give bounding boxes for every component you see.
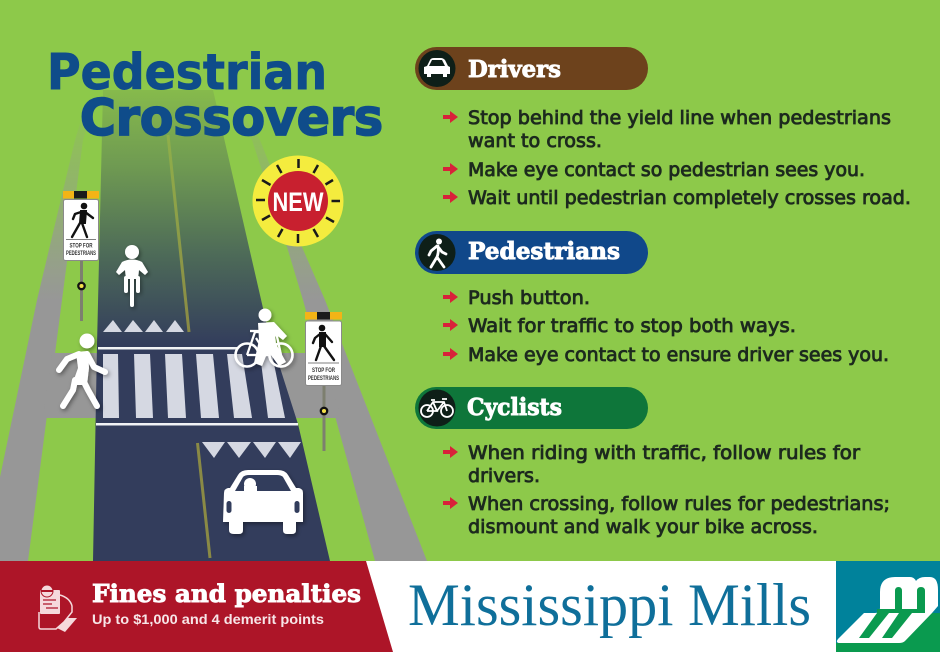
cyclists rules xyxy=(443,442,890,538)
car icon xyxy=(223,470,303,534)
NEW badge: NEW xyxy=(272,187,324,217)
drivers rules: Wait until pedestrian completely crosses road. xyxy=(468,187,911,209)
crosswalk stripes xyxy=(103,354,285,418)
cross sidewalk xyxy=(43,353,342,418)
pedestrian icon xyxy=(59,334,105,406)
cyclists rules: dismount and walk your bike across. xyxy=(468,516,818,538)
pedestrians rules xyxy=(443,287,889,366)
NEW badge xyxy=(252,156,344,246)
fines detail: Up to $1,000 and 4 demerit points xyxy=(92,611,324,627)
fines heading: Fines and penalties xyxy=(92,579,361,608)
panel: pedestrians xyxy=(415,231,889,366)
pedestrians rules: Wait for traffic to stop both ways. xyxy=(468,315,796,337)
cyclists heading band xyxy=(415,387,648,429)
stop lines xyxy=(96,347,298,426)
right sidewalk xyxy=(222,100,427,561)
left crossing sign xyxy=(63,191,99,321)
pedestrians rules: Make eye contact to ensure driver sees you. xyxy=(468,344,889,366)
drivers heading band xyxy=(415,47,648,90)
road surface xyxy=(93,90,330,561)
drivers rules: Stop behind the yield line when pedestrians xyxy=(468,107,891,129)
right crossing sign xyxy=(305,312,342,451)
right crossing sign: STOP FOR xyxy=(312,367,335,374)
cyclists rules: drivers. xyxy=(468,465,540,487)
drivers rules: want to cross. xyxy=(468,130,602,152)
drivers rules: Make eye contact so pedestrian sees you. xyxy=(468,159,865,181)
title xyxy=(47,44,383,147)
logo xyxy=(836,561,940,652)
panel: fines and penalties xyxy=(0,561,393,652)
white footer strip xyxy=(360,561,940,652)
Mississippi Mills wordmark: Mississippi Mills xyxy=(408,572,811,638)
yield triangles lower xyxy=(202,442,301,458)
cyclist riding icon xyxy=(116,245,148,307)
title: Crossovers xyxy=(80,89,383,147)
walking cyclist icon xyxy=(236,308,292,366)
road scene illustration xyxy=(0,90,427,561)
left crossing sign: STOP FOR xyxy=(70,244,93,250)
panel: drivers xyxy=(415,47,911,209)
title: Pedestrian xyxy=(47,44,327,101)
pedestrians rules: Push button. xyxy=(468,287,590,309)
yield triangles upper xyxy=(103,320,184,332)
icon: ticket in hand xyxy=(39,585,77,632)
cyclists rules: When riding with traffic, follow rules for xyxy=(468,442,860,464)
cyclists heading band: Cyclists xyxy=(467,394,562,421)
drivers heading band: Drivers xyxy=(468,56,561,83)
drivers rules xyxy=(443,107,911,209)
panel: cyclists xyxy=(415,387,890,538)
left sidewalk xyxy=(0,110,92,561)
right crossing sign: PEDESTRIANS xyxy=(308,375,339,382)
road centre line upper xyxy=(168,135,189,332)
road centre line lower xyxy=(198,443,210,558)
left crossing sign: PEDESTRIANS xyxy=(66,251,96,257)
pedestrians heading band: Pedestrians xyxy=(468,238,620,265)
pedestrians heading band xyxy=(415,231,648,274)
cyclists rules: When crossing, follow rules for pedestrians; xyxy=(468,493,890,515)
